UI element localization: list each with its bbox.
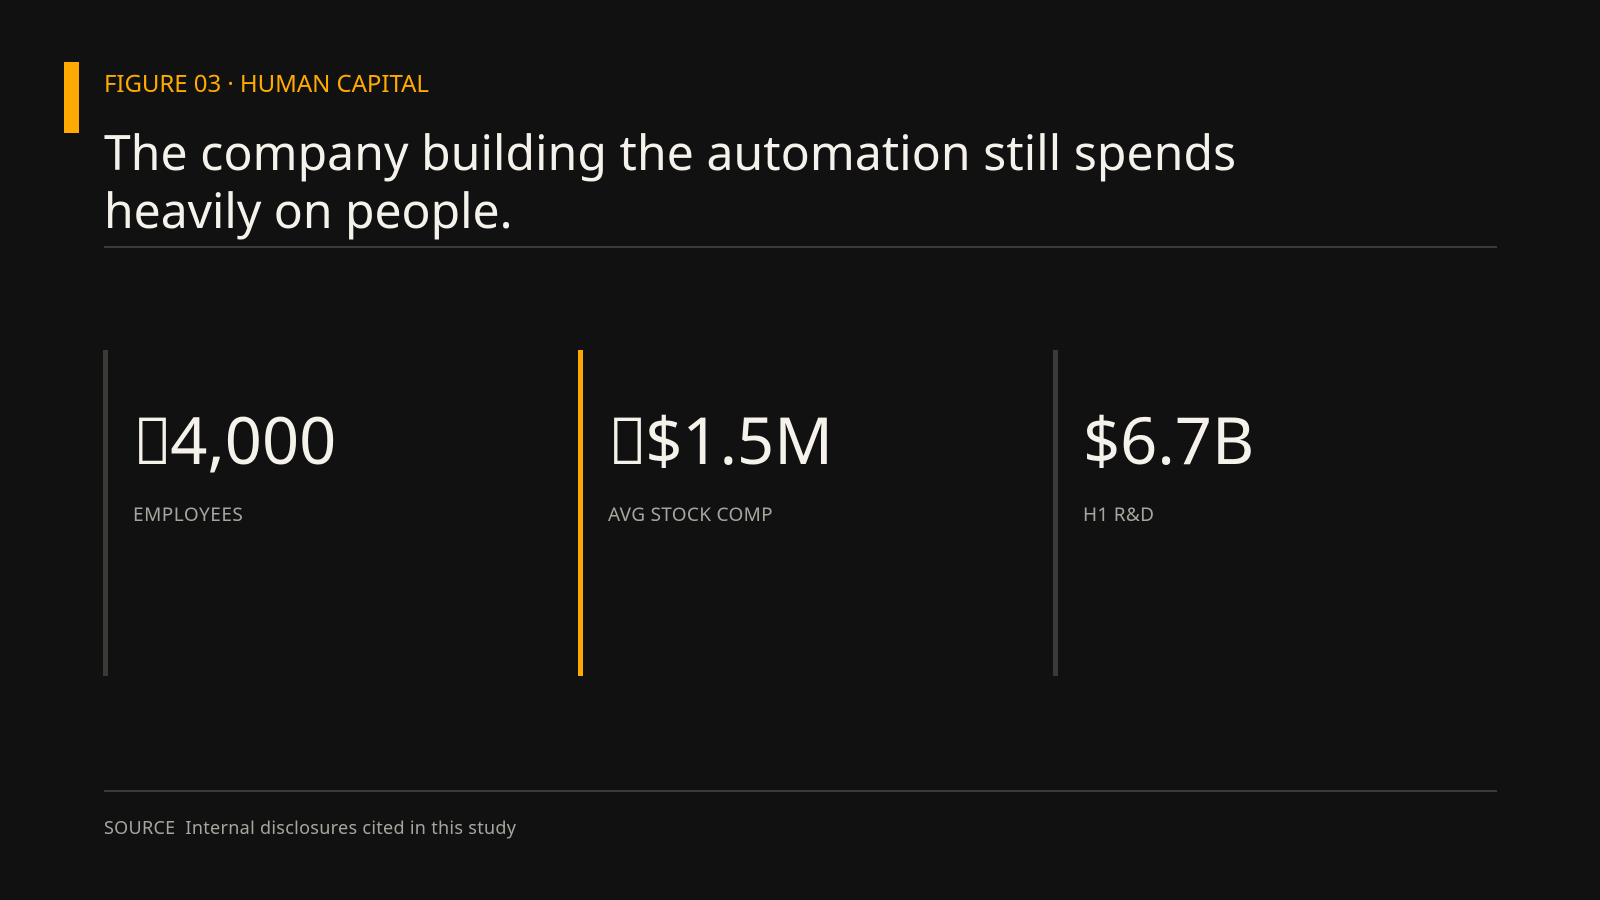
accent bar [64, 62, 79, 133]
panel: average stock compensation [578, 350, 833, 676]
panel: employees [103, 350, 336, 676]
panel: H1 R&D [1053, 350, 1254, 676]
footer rule [104, 790, 1497, 792]
title: The company building the automation still spends [104, 120, 1236, 185]
title [104, 120, 1236, 243]
card rule: employees [103, 350, 108, 676]
stat: R&D value: $6.7B [1083, 396, 1254, 484]
title: heavily on people. [104, 178, 512, 243]
stat label: stock comp: AVG STOCK COMP [608, 501, 773, 527]
source note: SOURCE Internal disclosures cited in this study [104, 816, 516, 840]
card rule: stock comp highlight [578, 350, 583, 676]
stat: stock comp value: $1.5M [608, 396, 833, 484]
stat: employees value: 4,000 [133, 396, 336, 484]
eyebrow label: FIGURE 03 · HUMAN CAPITAL [104, 67, 429, 100]
stat label: R&D: H1 R&D [1083, 501, 1154, 527]
header rule [104, 246, 1497, 248]
stat label: employees: EMPLOYEES [133, 501, 243, 527]
card rule: R&D [1053, 350, 1058, 676]
